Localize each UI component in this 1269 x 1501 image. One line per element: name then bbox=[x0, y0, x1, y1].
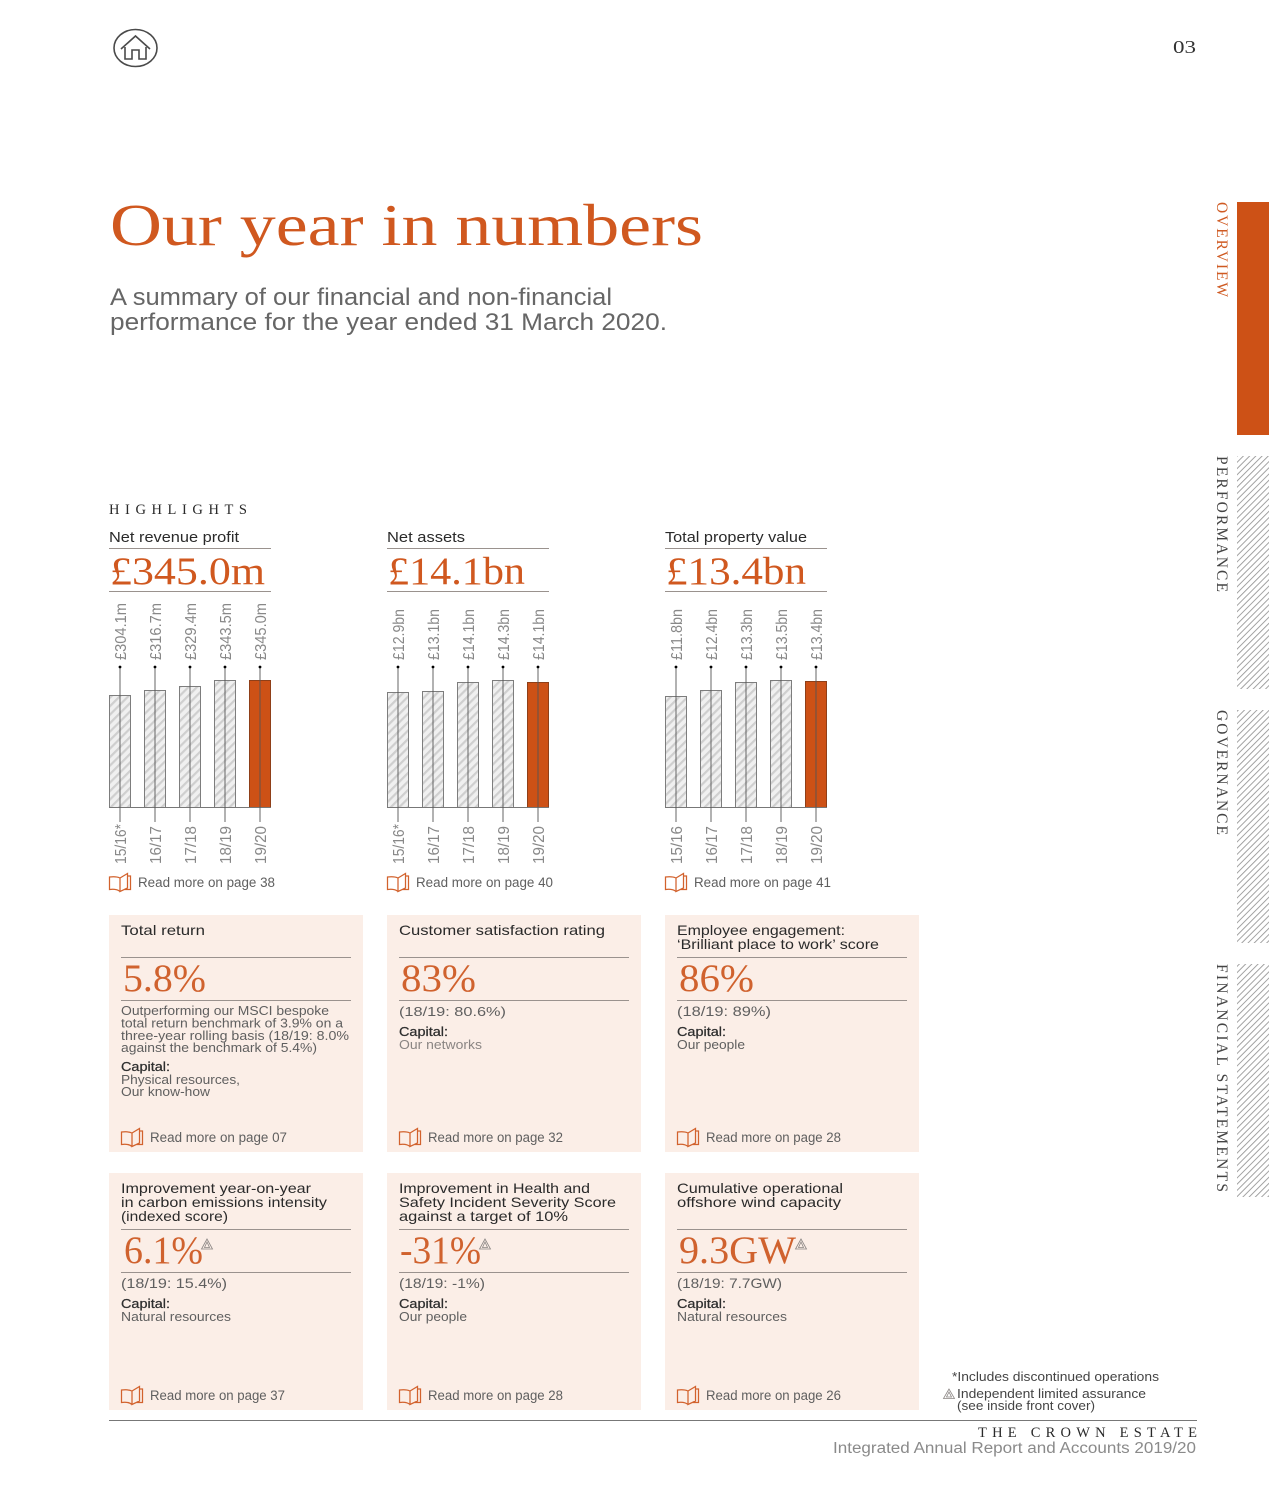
panel: total return: against the benchmark of 5.4%) bbox=[121, 1040, 317, 1055]
bar chart: total property value: £12.4bn bbox=[704, 609, 721, 660]
bar chart: net assets: £13.1bn bbox=[426, 609, 443, 660]
panel: health and safety score: -31% bbox=[400, 1229, 481, 1272]
panel: employee engagement: ‘Brilliant place to work’ score bbox=[677, 936, 879, 952]
bar chart: net assets: £14.3bn bbox=[496, 609, 513, 660]
panel: employee engagement: Our people bbox=[677, 1037, 745, 1052]
intro text bbox=[110, 284, 667, 336]
panel: carbon emissions intensity: Read more on page 37 bbox=[150, 1388, 285, 1403]
panel: net revenue profit bbox=[109, 530, 275, 892]
bar chart: total property value: £13.3bn bbox=[739, 609, 756, 660]
panel: carbon emissions intensity: Improvement year-on-year bbox=[121, 1180, 311, 1196]
panel: carbon emissions intensity bbox=[109, 1173, 363, 1410]
panel: offshore wind capacity: Natural resources bbox=[677, 1309, 788, 1324]
bar chart: total property value: £13.5bn bbox=[774, 609, 791, 660]
panel: employee engagement: (18/19: 89%) bbox=[677, 1003, 771, 1019]
bar chart: total property value: 16/17 bbox=[704, 826, 721, 864]
footnotes: Independent limited assurance bbox=[957, 1387, 1146, 1401]
panel: total property value bbox=[665, 530, 831, 892]
read more link bbox=[388, 874, 553, 892]
bar chart: net revenue profit: 19/20 bbox=[253, 826, 270, 864]
bar chart: net revenue profit: 15/16* bbox=[113, 824, 130, 864]
panel: employee engagement: 86% bbox=[679, 957, 754, 1000]
panel: total return: Capital: bbox=[121, 1059, 170, 1074]
bar chart: net revenue profit: £345.0m bbox=[253, 603, 270, 660]
footer: Integrated Annual Report and Accounts 2019/20 bbox=[833, 1440, 1196, 1457]
bar chart: net assets: £14.1bn bbox=[531, 609, 548, 660]
bar chart: net assets bbox=[387, 609, 549, 864]
panel: customer satisfaction rating: Capital: bbox=[399, 1024, 448, 1039]
read more link: Read more on page 41 bbox=[694, 875, 831, 890]
panel: offshore wind capacity: Capital: bbox=[677, 1296, 726, 1311]
bar chart: net revenue profit: £329.4m bbox=[183, 603, 200, 660]
read more link: Read more on page 40 bbox=[416, 875, 553, 890]
read more link bbox=[110, 874, 275, 892]
footer bbox=[109, 1420, 1197, 1457]
panel: health and safety score: Capital: bbox=[399, 1296, 448, 1311]
section navigation tabs: PERFORMANCE bbox=[1213, 456, 1230, 592]
bar chart: total property value: 19/20 bbox=[809, 826, 826, 864]
panel: health and safety score: Improvement in Health and bbox=[399, 1180, 590, 1196]
heading: highlights: HIGHLIGHTS bbox=[109, 502, 247, 518]
footnotes: *Includes discontinued operations bbox=[952, 1370, 1159, 1384]
panel: total return: Outperforming our MSCI bespoke bbox=[121, 1003, 329, 1018]
section navigation tabs: OVERVIEW bbox=[1213, 202, 1230, 297]
panel: customer satisfaction rating: (18/19: 80.6%) bbox=[399, 1004, 506, 1019]
bar chart: total property value: 17/18 bbox=[739, 826, 756, 864]
footnotes: (see inside front cover) bbox=[957, 1399, 1095, 1413]
panel: offshore wind capacity: Read more on page 26 bbox=[706, 1388, 841, 1403]
panel: health and safety score: Our people bbox=[399, 1309, 467, 1324]
bar chart: net revenue profit bbox=[109, 603, 271, 864]
footnotes bbox=[944, 1370, 1159, 1413]
bar chart: total property value: £11.8bn bbox=[669, 609, 686, 660]
panel: offshore wind capacity: 9.3GW bbox=[679, 1229, 796, 1272]
panel: customer satisfaction rating: Customer satisfaction rating bbox=[399, 922, 605, 938]
panel: total return: Physical resources, bbox=[121, 1072, 240, 1087]
icon: home button bbox=[114, 30, 157, 66]
panel: total return: Total return bbox=[121, 922, 205, 938]
bar chart: total property value: 18/19 bbox=[774, 826, 791, 864]
read more link bbox=[666, 874, 831, 892]
panel: net assets: Net assets bbox=[387, 530, 465, 546]
section navigation tabs: FINANCIAL STATEMENTS bbox=[1213, 964, 1230, 1192]
panel: total property value: Total property value bbox=[665, 530, 807, 546]
footer: THE CROWN ESTATE bbox=[978, 1425, 1197, 1441]
panel: net revenue profit: Net revenue profit bbox=[109, 530, 239, 546]
panel: health and safety score: Read more on page 28 bbox=[428, 1388, 563, 1403]
panel: customer satisfaction rating: Read more on page 32 bbox=[428, 1130, 563, 1145]
panel: carbon emissions intensity: 6.1% bbox=[124, 1229, 203, 1272]
panel: employee engagement: Read more on page 28 bbox=[706, 1130, 841, 1145]
bar chart: total property value bbox=[665, 609, 827, 864]
bar chart: net assets: 15/16* bbox=[391, 824, 408, 864]
panel: health and safety score: against a target of 10% bbox=[399, 1208, 568, 1224]
panel: total property value: £13.4bn bbox=[666, 550, 806, 593]
panel: carbon emissions intensity: (indexed score) bbox=[121, 1208, 228, 1224]
panel: customer satisfaction rating: Our networks bbox=[399, 1037, 483, 1052]
panel: offshore wind capacity: Cumulative operational bbox=[677, 1180, 843, 1196]
panel: offshore wind capacity: (18/19: 7.7GW) bbox=[677, 1275, 782, 1291]
panel: offshore wind capacity bbox=[665, 1173, 919, 1410]
section navigation tabs bbox=[1213, 202, 1269, 1197]
bar chart: net assets: 17/18 bbox=[461, 826, 478, 864]
panel: employee engagement: Employee engagement: bbox=[677, 922, 845, 938]
bar chart: net revenue profit: £304.1m bbox=[113, 603, 130, 660]
panel: total return: Our know-how bbox=[121, 1084, 211, 1099]
panel: carbon emissions intensity: Natural resources bbox=[121, 1309, 232, 1324]
panel: carbon emissions intensity: (18/19: 15.4%) bbox=[121, 1275, 227, 1291]
panel: carbon emissions intensity: in carbon emissions intensity bbox=[121, 1194, 327, 1210]
panel: health and safety score bbox=[387, 1173, 641, 1410]
panel: net assets bbox=[387, 530, 553, 892]
panel: health and safety score: Safety Incident Severity Score bbox=[399, 1194, 616, 1210]
panel: health and safety score: (18/19: -1%) bbox=[399, 1275, 485, 1291]
panel: employee engagement: Capital: bbox=[677, 1024, 726, 1039]
title: Our year in numbers bbox=[110, 192, 703, 258]
panel: customer satisfaction rating: 83% bbox=[401, 957, 476, 1000]
bar chart: total property value: 15/16 bbox=[669, 826, 686, 864]
bar chart: net revenue profit: 16/17 bbox=[148, 826, 165, 864]
bar chart: net assets: £12.9bn bbox=[391, 609, 408, 660]
panel: total return: 5.8% bbox=[123, 957, 206, 1000]
section navigation tabs: GOVERNANCE bbox=[1213, 710, 1230, 835]
panel: offshore wind capacity: offshore wind capacity bbox=[677, 1194, 841, 1210]
panel: total return: total return benchmark of 3.9% on a bbox=[121, 1016, 344, 1030]
panel: net revenue profit: £345.0m bbox=[110, 550, 265, 593]
bar chart: net assets: 19/20 bbox=[531, 826, 548, 864]
panel: carbon emissions intensity: Capital: bbox=[121, 1296, 170, 1311]
panel: total return bbox=[109, 915, 363, 1152]
bar chart: net assets: £14.1bn bbox=[461, 609, 478, 660]
intro text: A summary of our financial and non-financial bbox=[110, 284, 612, 311]
bar chart: total property value: £13.4bn bbox=[809, 609, 826, 660]
bar chart: net revenue profit: £316.7m bbox=[148, 603, 165, 660]
panel: employee engagement bbox=[665, 915, 919, 1152]
page number: 03 bbox=[1173, 37, 1196, 57]
read more link: Read more on page 38 bbox=[138, 875, 275, 890]
intro text: performance for the year ended 31 March 2020. bbox=[110, 309, 667, 336]
panel: total return: three-year rolling basis (18/19: 8.0% bbox=[121, 1028, 349, 1043]
bar chart: net revenue profit: £343.5m bbox=[218, 603, 235, 660]
panel: net assets: £14.1bn bbox=[388, 550, 525, 593]
panel: total return: Read more on page 07 bbox=[150, 1130, 287, 1145]
panel: customer satisfaction rating bbox=[387, 915, 641, 1152]
bar chart: net revenue profit: 18/19 bbox=[218, 826, 235, 864]
bar chart: net assets: 16/17 bbox=[426, 826, 443, 864]
bar chart: net assets: 18/19 bbox=[496, 826, 513, 864]
bar chart: net revenue profit: 17/18 bbox=[183, 826, 200, 864]
